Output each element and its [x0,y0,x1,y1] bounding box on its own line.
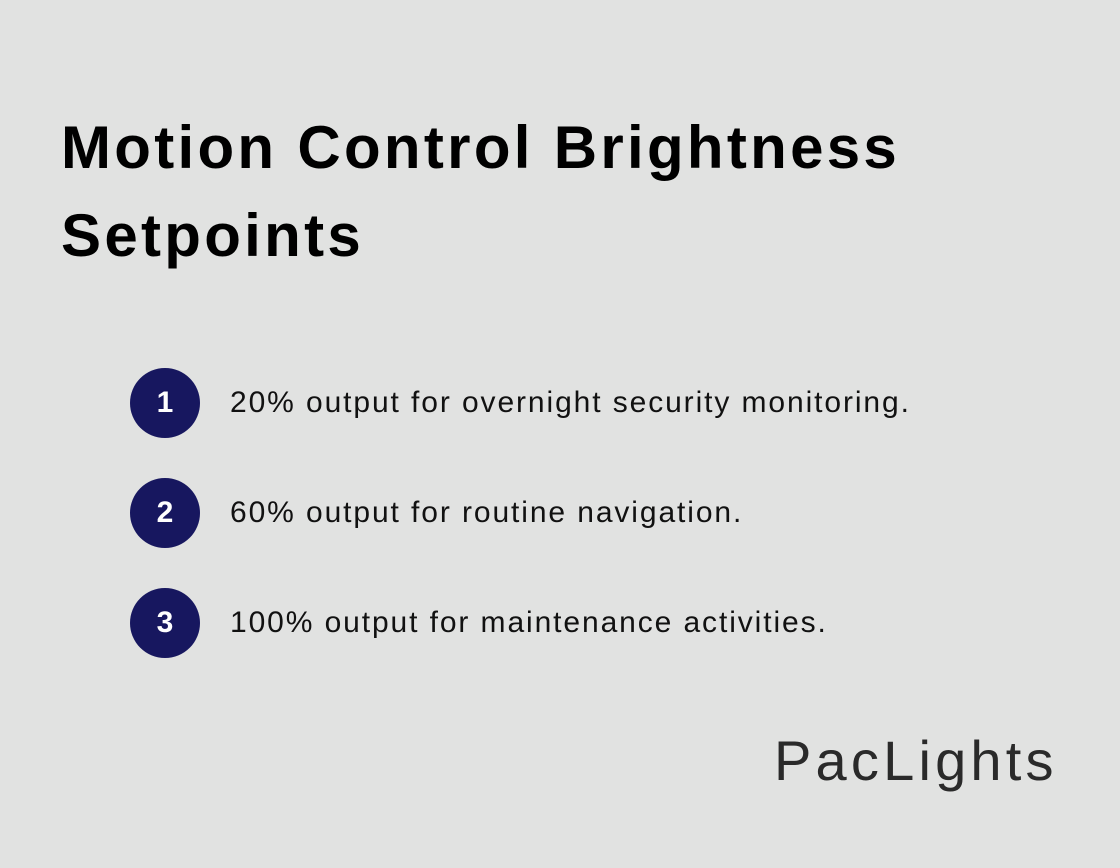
title: Motion Control Brightness [61,114,900,181]
badge 3: 3 [157,606,173,639]
title [61,114,900,269]
text 1: 20% output for overnight security monitoring. [230,386,911,419]
item 3 [130,588,828,658]
badge 1: 1 [157,386,173,419]
logo: PacLights [774,729,1058,792]
text 3: 100% output for maintenance activities. [230,606,828,639]
title: Setpoints [61,202,364,269]
badge 1 [130,368,200,438]
item 2 [130,478,743,548]
item 1 [130,368,911,438]
badge 2 [130,478,200,548]
badge 3 [130,588,200,658]
text 2: 60% output for routine navigation. [230,496,743,529]
badge 2: 2 [157,496,173,529]
